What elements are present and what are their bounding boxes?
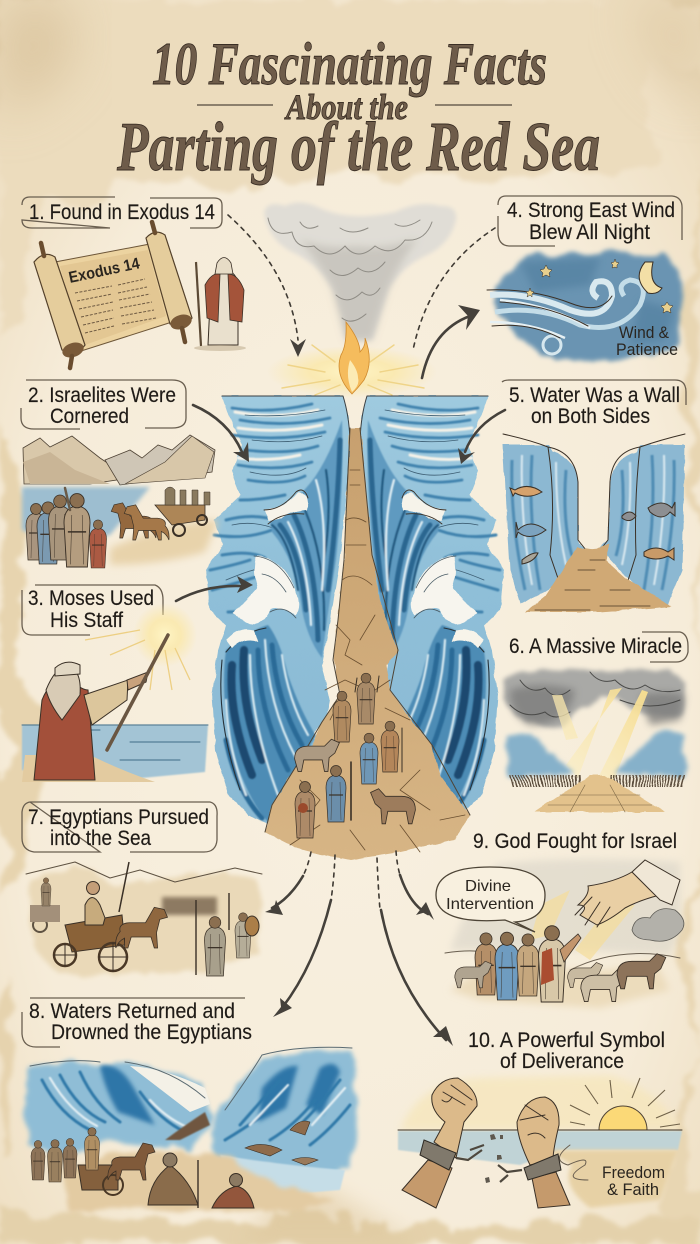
crowd: [26, 488, 106, 568]
mountains: [23, 435, 215, 485]
scroll heading: Exodus 14: [67, 255, 141, 287]
broken chain pieces: [485, 1134, 503, 1183]
label 5: [502, 380, 686, 428]
icon: wind panel: [487, 253, 681, 360]
sea behind Moses: [22, 725, 208, 782]
figure: walker with staff: [381, 721, 399, 772]
storm clouds: [505, 668, 688, 727]
chariot: [54, 862, 168, 971]
title line 2: About the: [284, 87, 408, 127]
label 2: [21, 380, 186, 429]
arrow: fact 3 to sea: [176, 576, 253, 601]
label 10 second line: of Deliverance: [500, 1050, 624, 1073]
dry path: [265, 428, 470, 860]
chariot and army: [31, 1128, 155, 1195]
sea: [398, 1131, 682, 1165]
fact 10: symbol of deliverance: & Faith: [607, 1180, 659, 1199]
label 7: 7. Egyptians Pursued: [28, 806, 209, 829]
pillar of smoke: [264, 202, 456, 340]
label 5: on Both Sides: [531, 405, 650, 428]
fact 6: a massive miracle: [505, 632, 688, 812]
fact 4: strong east wind: [487, 196, 682, 360]
label 3: 3. Moses Used: [28, 587, 154, 610]
distant army: [30, 878, 217, 932]
moon: [639, 262, 662, 293]
central illustration: parted sea: [206, 396, 504, 860]
central illustration: smoke and fire: [264, 202, 456, 398]
label 3: His Staff: [50, 609, 123, 632]
speech bubble: Divine: [465, 878, 511, 895]
staff glow: [85, 603, 197, 690]
arrow: to fact 7: [265, 852, 311, 915]
arrow: to fact 9: [396, 851, 434, 920]
label 8: 8. Waters Returned and: [29, 1000, 235, 1023]
label 9: 9. God Fought for Israel: [473, 830, 677, 853]
label 2: 2. Israelites Were: [28, 384, 176, 407]
figure: leader: [357, 673, 375, 724]
pursuing chariot: [111, 487, 210, 540]
label 4: [498, 196, 682, 246]
wind caption: Wind &: [619, 323, 670, 342]
fact 3: Moses used his staff: [22, 585, 208, 782]
reeds and road: [510, 775, 684, 812]
figure: blue robe: [360, 733, 378, 784]
title: [116, 31, 600, 186]
beach: [545, 1150, 678, 1208]
fish: [648, 502, 675, 517]
left wall panel: [503, 434, 586, 604]
side waves: [505, 734, 575, 778]
rays: [530, 890, 635, 960]
right fist with shackle: [498, 1097, 570, 1208]
label 6: 6. A Massive Miracle: [509, 635, 682, 658]
fact 7: Egyptians pursued: [22, 802, 262, 976]
label 10: 10. A Powerful Symbol: [468, 1029, 665, 1052]
arrow: fact 5 to sea: [458, 410, 505, 464]
figure: Moses beside scroll: [194, 258, 246, 351]
horse: [116, 907, 168, 948]
label 5: 5. Water Was a Wall: [509, 384, 680, 407]
arrow: fact 2 to sea: [193, 405, 249, 462]
hills: [445, 951, 680, 970]
icon: torah scroll: [34, 222, 194, 368]
hand from heaven: [575, 860, 680, 927]
arrows: fact 4 to centre: [413, 228, 495, 378]
fact 2: Israelites cornered: [21, 380, 218, 568]
figure: Moses raising staff: [34, 635, 168, 780]
fish: [510, 486, 542, 496]
label 1: [22, 197, 222, 228]
sun: [570, 1078, 680, 1130]
animal: goat: [295, 739, 339, 771]
drowning figures: [165, 1112, 318, 1165]
right wall panel: [600, 434, 685, 604]
seabed: [525, 544, 672, 612]
fact 9: God fought for Israel: [436, 830, 684, 1008]
label 8: Drowned the Egyptians: [51, 1021, 252, 1044]
label 3: [22, 585, 163, 635]
Israelites group: [475, 926, 581, 1002]
cloud: [632, 909, 684, 941]
label 8: [22, 998, 252, 1047]
collapsing waves: [25, 1047, 357, 1195]
label 2: Cornered: [50, 405, 129, 428]
shore water: [22, 487, 150, 545]
label 7: into the Sea: [50, 827, 151, 850]
figure: pilgrim: [333, 691, 351, 742]
figure: woman with bundle: [295, 782, 315, 838]
flame: [267, 322, 437, 398]
right water wall: [360, 396, 504, 824]
light rays: [552, 688, 648, 780]
sky wash: [450, 859, 680, 955]
fact 10: symbol of deliverance: [398, 1029, 682, 1208]
fact 8: waters returned: [22, 998, 357, 1210]
left water wall: [206, 396, 350, 824]
label 4: 4. Strong East Wind: [507, 199, 675, 222]
dotted arrows from the path: [265, 851, 453, 1046]
fact 1: found in Exodus 14: [22, 197, 246, 368]
figure: shepherd with staff: [326, 766, 346, 822]
sunset sky: [400, 1075, 680, 1130]
title line 1: 10 Fascinating Facts: [152, 31, 547, 97]
flock: [455, 954, 666, 1002]
desert scene: [30, 866, 260, 975]
foot soldiers: [196, 893, 259, 976]
label 4: Blew All Night: [529, 221, 650, 244]
label 1: 1. Found in Exodus 14: [29, 201, 215, 224]
speech bubble: Intervention: [446, 896, 534, 913]
left fist with shackle: [402, 1078, 484, 1208]
arrow: fact 1 to centre: [228, 215, 306, 357]
freedom caption: Freedom: [602, 1163, 665, 1182]
arrow: to fact 10: [377, 858, 453, 1046]
fact 5: water wall: [502, 380, 686, 612]
label 7: [22, 802, 217, 852]
arrow: to fact 8: [273, 855, 335, 1017]
foreground soldiers: [148, 1153, 254, 1208]
icon: wind panel: Patience: [616, 340, 678, 359]
speech bubble: [436, 867, 545, 932]
travellers: [295, 673, 415, 838]
shore: [60, 1150, 335, 1210]
animal: ox: [371, 789, 415, 824]
